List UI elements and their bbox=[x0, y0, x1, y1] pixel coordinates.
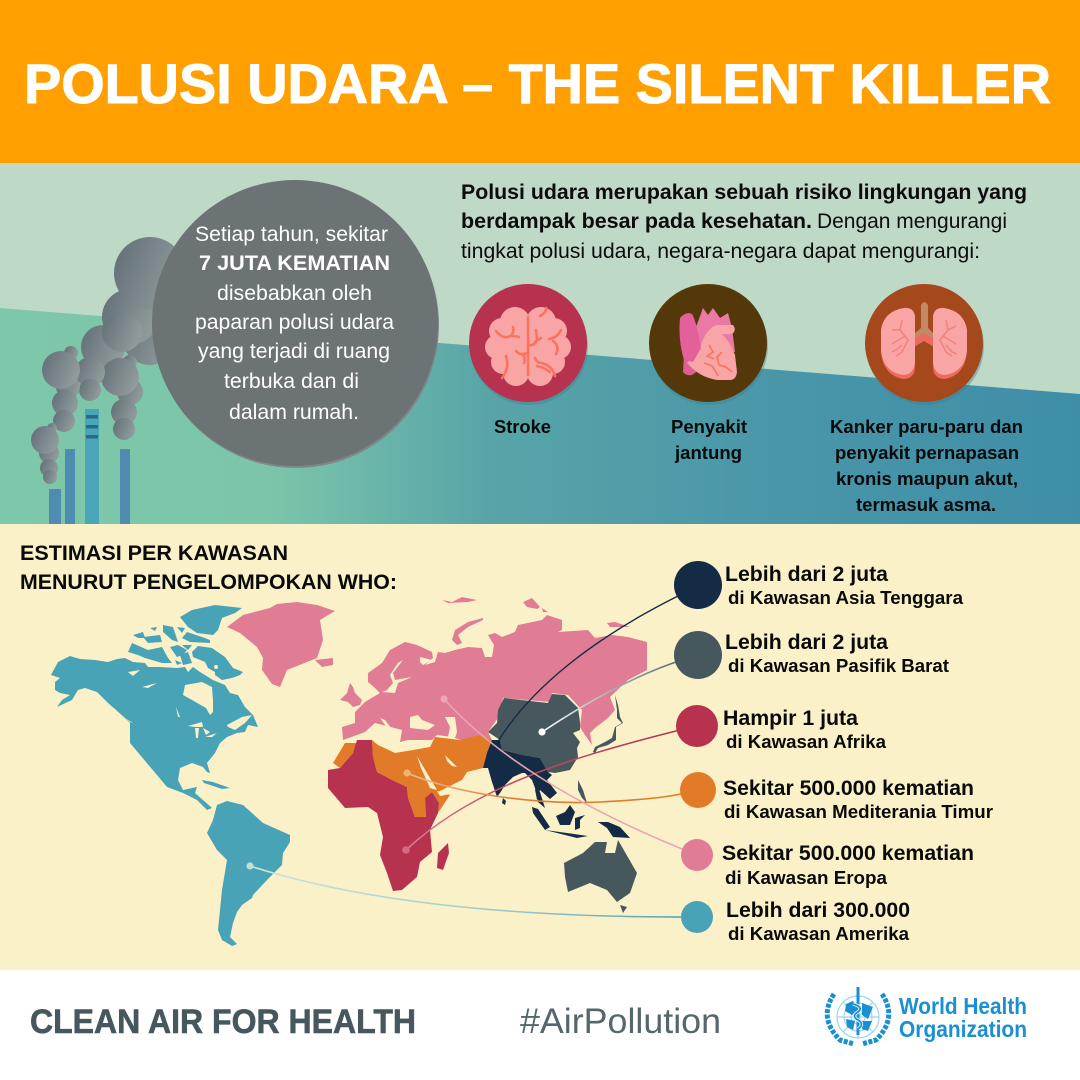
intro text block: Polusi udara merupakan sebuah risiko lingkungan yang bbox=[461, 181, 1027, 204]
legend: Afrika bbox=[676, 705, 887, 752]
map region: Europe bbox=[340, 597, 647, 745]
map cutouts: Red Sea and Gulf bbox=[417, 755, 457, 796]
callout: 7 juta kematian circle: 7 JUTA KEMATIAN bbox=[199, 252, 390, 275]
legend: Amerika: Lebih dari 300.000 bbox=[726, 899, 910, 922]
icon: brain (stroke) bbox=[469, 284, 588, 405]
callout: 7 juta kematian circle: dalam rumah. bbox=[229, 401, 359, 424]
legend: Mediterania Timur: Sekitar 500.000 kematian bbox=[723, 777, 974, 800]
legend: Afrika: Hampir 1 juta bbox=[723, 707, 858, 730]
map region: Africa bbox=[328, 740, 449, 891]
map region: Americas bbox=[51, 605, 290, 946]
legend: Asia Tenggara bbox=[674, 561, 964, 609]
logo: World Health Organization bbox=[827, 987, 1027, 1044]
text: WHO name: Organization bbox=[899, 1016, 1027, 1042]
text: heart disease label: Penyakit bbox=[671, 416, 747, 437]
icon: lungs bbox=[865, 284, 984, 405]
legend: Asia Tenggara: di Kawasan Asia Tenggara bbox=[728, 587, 964, 608]
footer: campaign name: CLEAN AIR FOR HEALTH bbox=[30, 1003, 416, 1041]
text: WHO name bbox=[899, 993, 1027, 1042]
callout: 7 juta kematian circle: paparan polusi udara bbox=[195, 311, 394, 334]
map cutouts: European seas bbox=[380, 657, 457, 738]
legend: Eropa: di Kawasan Eropa bbox=[725, 867, 888, 888]
text: heart disease label bbox=[671, 416, 747, 463]
icon: WHO emblem bbox=[827, 987, 889, 1044]
callout: 7 juta kematian circle: Setiap tahun, sekitar bbox=[195, 223, 388, 246]
icon: factory chimneys bbox=[49, 409, 130, 524]
chart: world map bbox=[51, 597, 647, 946]
legend: Eropa bbox=[681, 839, 974, 888]
map cutouts: North American waters bbox=[113, 665, 252, 778]
map region: Greenland and Iceland bbox=[227, 602, 335, 687]
footer: hashtag: #AirPollution bbox=[520, 1002, 721, 1041]
text: WHO name: World Health bbox=[899, 993, 1027, 1019]
text: lung cancer label bbox=[830, 416, 1023, 515]
map region: Eastern Mediterranean bbox=[333, 735, 492, 817]
legend: Afrika: di Kawasan Afrika bbox=[726, 731, 887, 752]
callout: 7 juta kematian circle: yang terjadi di ruang bbox=[198, 340, 390, 363]
icon: smoke clouds bbox=[31, 237, 186, 484]
intro text block: Dengan mengurangi bbox=[817, 210, 1007, 233]
text: heart disease label: jantung bbox=[674, 442, 742, 463]
legend: Mediterania Timur: di Kawasan Mediterania Timur bbox=[724, 801, 994, 822]
legend: Pasifik Barat bbox=[674, 631, 950, 679]
chart: connector lines bbox=[246, 596, 698, 917]
legend: Asia Tenggara: Lebih dari 2 juta bbox=[725, 563, 888, 586]
title banner: POLUSI UDARA – THE SILENT KILLER bbox=[24, 52, 1051, 115]
legend: Amerika bbox=[681, 899, 910, 944]
legend: Pasifik Barat: di Kawasan Pasifik Barat bbox=[728, 655, 950, 676]
callout: 7 juta kematian circle bbox=[152, 180, 439, 468]
panel: sky and hill background bbox=[0, 163, 1080, 524]
legend: Mediterania Timur bbox=[680, 772, 994, 822]
intro text block: berdampak besar pada kesehatan. bbox=[461, 210, 812, 233]
footer band bbox=[0, 970, 1080, 1080]
text: lung cancer label: Kanker paru-paru dan bbox=[830, 416, 1023, 437]
intro text block bbox=[461, 181, 1027, 263]
title banner bbox=[0, 0, 1080, 163]
heading: regional estimate: ESTIMASI PER KAWASAN bbox=[20, 541, 288, 565]
legend: Pasifik Barat: Lebih dari 2 juta bbox=[725, 631, 888, 654]
map region: Western Pacific bbox=[488, 694, 637, 913]
legend: Eropa: Sekitar 500.000 kematian bbox=[722, 842, 974, 865]
heading: regional estimate: MENURUT PENGELOMPOKAN WHO: bbox=[20, 570, 397, 594]
text: lung cancer label: kronis maupun akut, bbox=[836, 468, 1018, 489]
heading: regional estimate bbox=[20, 541, 397, 594]
text: stroke label: Stroke bbox=[494, 416, 551, 437]
text: lung cancer label: termasuk asma. bbox=[856, 494, 996, 515]
icon: heart bbox=[649, 284, 768, 405]
intro text block: tingkat polusi udara, negara-negara dapat mengurangi: bbox=[461, 240, 980, 263]
text: lung cancer label: penyakit pernapasan bbox=[835, 442, 1019, 463]
callout: 7 juta kematian circle: disebabkan oleh bbox=[217, 282, 372, 305]
legend: Amerika: di Kawasan Amerika bbox=[728, 923, 910, 944]
callout: 7 juta kematian circle: terbuka dan di bbox=[224, 370, 359, 393]
map region: South-East Asia bbox=[483, 740, 630, 838]
